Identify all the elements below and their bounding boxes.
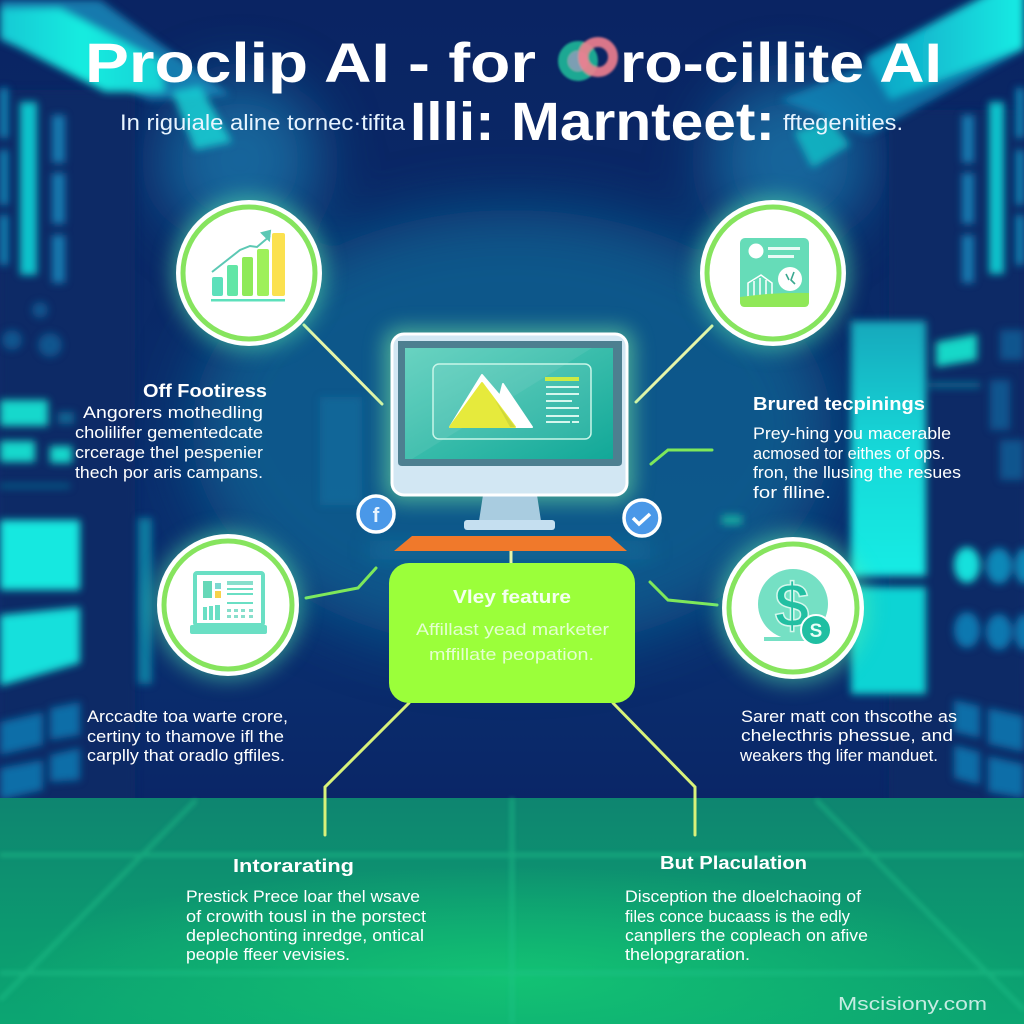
icon: f badge [358,496,394,532]
text block: Intorarating [186,856,426,964]
floor [0,798,1024,1024]
subtitle: fftegenities. [783,110,903,135]
text block: But Placulation: canpllers the copleach on afive [625,927,868,945]
text block: Off Footiress: crcerage thel pespenier [75,444,264,462]
footer url: Mscisiony.com [838,994,987,1014]
screen panel with mountains [433,364,591,439]
subtitle: Illi: Marnteet: [410,92,775,152]
center panel: key feature: mffillate peopation. [429,645,594,664]
title: ro-cillite AI [620,31,942,94]
text block: Off Footiress: cholilifer gementedcate [75,424,263,442]
text block: Brured tecpinings: Brured tecpinings [753,394,925,414]
title [85,31,942,94]
icon: dollar circle [717,532,869,684]
center panel: key feature: Vley feature [453,587,571,607]
icon: growth chart circle [171,195,327,351]
text block: Brured tecpinings [753,394,961,502]
text block: Intorarating: Intorarating [233,856,354,876]
text block: But Placulation: But Placulation [660,853,807,873]
text block: Brured tecpinings: acmosed tor eithes of ops. [753,445,945,463]
text block: But Placulation: thelopgraration. [625,946,750,964]
text block: But Placulation: files conce bucaass is the edly [625,908,851,926]
icon: f badge: f [373,505,380,527]
text block: Intorarating: deplechonting inredge, ontical [186,927,424,945]
subtitle: In riguiale aline tornec·tifita [120,110,406,135]
text block: But Placulation: Disception the dloelchaoing of [625,888,861,906]
monitor [384,328,634,530]
text block: Intorarating: of crowith tousl in the porstect [186,908,426,926]
text block: Brured tecpinings: fron, the llusing the resues [753,464,961,482]
icon: dollar circle: S [810,621,822,642]
text block: right lower [739,708,957,765]
icon: laptop circle [153,530,303,680]
text block: Intorarating: people ffeer vevisies. [186,946,350,964]
title: Proclip AI - for [85,31,536,94]
text block: Off Footiress: thech por aris campans. [75,464,263,482]
icon: check badge [624,500,660,536]
text block: left lower [87,708,288,765]
center panel: key feature: Affillast yead marketer [416,620,609,639]
text block: But Placulation [625,853,868,964]
text block: Off Footiress: Off Footiress [143,381,267,401]
text block: left lower: carplly that oradlo gffiles. [87,747,285,765]
text block: right lower: weakers thg lifer manduet. [739,747,938,765]
monitor stand [464,495,555,530]
text block: Brured tecpinings: Prey-hing you macerable [753,425,951,443]
text block: left lower: certiny to thamove ifl the [87,728,284,746]
icon: logo rings [563,42,613,76]
icon: dollar circle: $ [775,572,809,641]
text block: Brured tecpinings: for flline. [753,484,831,502]
text block: right lower: chelecthris phessue, and [741,727,953,745]
subtitle [120,92,903,152]
text block: Intorarating: Prestick Prece loar thel wsave [186,888,420,906]
text block: left lower: Arccadte toa warte crore, [87,708,288,726]
icon: card circle [695,195,851,351]
text block: Off Footiress: Angorers mothedling [83,404,263,422]
center panel: key feature [389,563,635,703]
text block: Off Footiress [75,381,267,482]
connector lines [304,325,717,835]
text block: right lower: Sarer matt con thscothe as [741,708,957,726]
orange platform [394,536,627,551]
